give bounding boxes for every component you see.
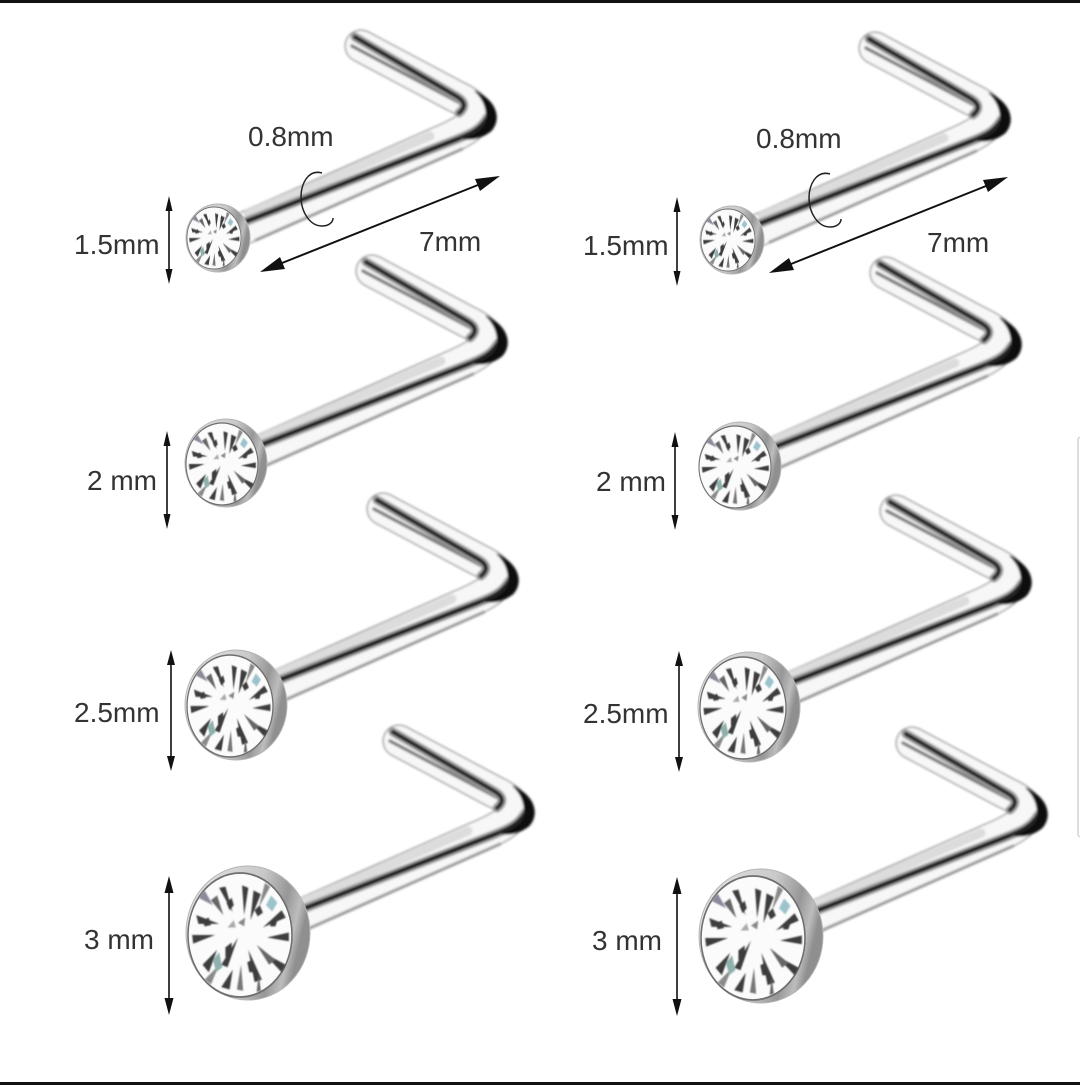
stud 3mm right — [699, 734, 1047, 1003]
label: 1.5mm right: 1.5mm — [583, 230, 669, 261]
arrow: 7mm right — [769, 177, 1008, 273]
arrow: 1.5mm left — [166, 196, 172, 284]
stud 1.5mm left — [186, 37, 496, 272]
right column: stud sizes — [698, 39, 1047, 1003]
stud 2mm left — [185, 262, 507, 507]
gauge curl right — [809, 173, 841, 227]
label: 2mm left: 2 mm — [87, 465, 157, 496]
stud 2mm right — [699, 264, 1021, 510]
label: length left: 7mm — [419, 226, 481, 257]
arrow: 2mm right — [672, 432, 678, 530]
arrow: 2.5mm left — [167, 650, 175, 771]
label: 2.5mm left: 2.5mm — [74, 697, 160, 728]
gauge curl left — [301, 172, 333, 226]
stud 2.5mm left — [185, 500, 518, 760]
label: 1.5mm left: 1.5mm — [74, 229, 160, 260]
dimension arrows — [164, 176, 1008, 1016]
arrow: 3mm left — [164, 876, 174, 1015]
left column: stud sizes — [185, 37, 534, 1000]
label: length right: 7mm — [927, 227, 989, 258]
arrow: 2.5mm right — [675, 651, 683, 772]
label: 3mm right: 3 mm — [592, 925, 662, 956]
stud 2.5mm right — [698, 502, 1031, 762]
label: 2mm right: 2 mm — [596, 466, 666, 497]
arrow: 2mm left — [164, 431, 170, 529]
label: 3mm left: 3 mm — [84, 924, 154, 955]
labels right — [583, 123, 989, 956]
top border — [0, 0, 1080, 3]
stud 3mm left — [186, 732, 534, 1000]
edge scroll handle — [1078, 437, 1080, 837]
stud 1.5mm right — [700, 39, 1010, 274]
label: gauge right: 0.8mm — [756, 123, 842, 154]
label: gauge left: 0.8mm — [248, 121, 334, 152]
labels left — [74, 121, 481, 955]
arrow: 3mm right — [672, 877, 682, 1016]
arrow: 1.5mm right — [674, 197, 680, 286]
bottom border — [0, 1082, 1080, 1085]
arrow: 7mm left — [260, 176, 500, 272]
label: 2.5mm right: 2.5mm — [583, 698, 669, 729]
